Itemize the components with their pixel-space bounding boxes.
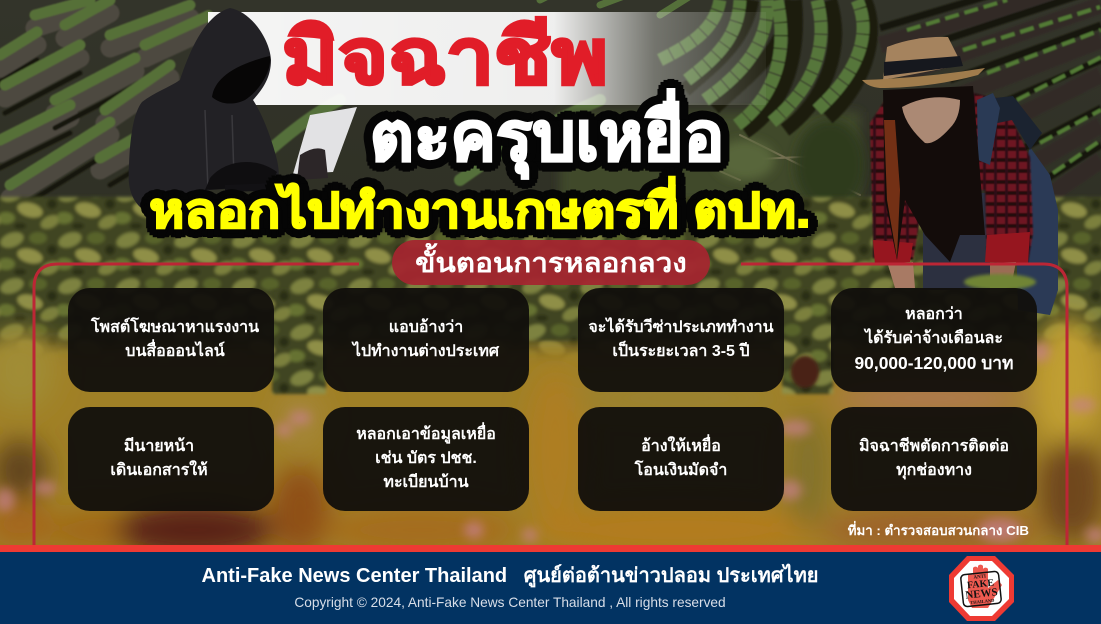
step card 6 [323,407,529,511]
title: red headline: มิจฉาชีพ [282,15,608,100]
steps heading: ขั้นตอนการหลอกลวง [415,248,687,278]
footer organisation name: Anti-Fake News Center Thailand ศูนย์ต่อต้านข่าวปลอม ประเทศไทย [202,565,818,587]
curved terraces [660,0,871,132]
step card 1: บนสื่อออนไลน์ [125,343,225,360]
step card 7: อ้างให้เหยื่อ [641,438,721,455]
source note: ที่มา : ตำรวจสอบสวนกลาง CIB [848,523,1029,538]
step card 4: ได้รับค่าจ้างเดือนละ [865,330,1003,347]
step card 3 [578,288,784,392]
logo: Anti Fake News stop sign: FAKE [967,578,995,591]
step card 3: เป็นระยะเวลา 3-5 ปี [612,343,750,360]
logo: Anti Fake News stop sign: THAILAND [970,598,995,605]
white title band [208,12,766,105]
sharp foliage between the cards [272,290,833,394]
middle terraces [270,0,865,210]
footer copyright: Copyright © 2024, Anti-Fake News Center Thailand , All rights reserved [294,595,726,610]
title: white headline: ตะครุบเหยื่อ [370,99,724,175]
step card 8: มิจฉาชีพตัดการติดต่อ [859,438,1009,455]
blurred foreground leaves [0,345,1101,565]
step card 4 [831,288,1037,392]
step card 7: โอนเงินมัดจำ [635,462,727,479]
step card 8 [831,407,1037,511]
step card 2: แอบอ้างว่า [389,319,463,336]
footer navy panel [0,552,1101,624]
step card 6: เช่น บัตร ปชช. [375,450,477,467]
step card 6: หลอกเอาข้อมูลเหยื่อ [356,426,496,443]
footer red strip [0,545,1101,552]
steps pill [392,240,710,285]
steps frame [34,264,1067,545]
step card 2 [323,288,529,392]
step card 4: หลอกว่า [905,306,963,323]
step card 5: มีนายหน้า [124,438,194,455]
step card 1: โพสต์โฆษณาหาแรงงาน [91,319,259,336]
step card 6: ทะเบียนบ้าน [383,474,469,491]
step card 4: 90,000-120,000 บาท [855,353,1013,373]
logo: Anti Fake News stop sign [949,556,1014,621]
step card 3: จะได้รับวีซ่าประเภททำงาน [588,319,774,336]
icon: hooded hacker with laptop [129,8,357,210]
step card 5 [68,407,274,511]
step card 1 [68,288,274,392]
step card 8: ทุกช่องทาง [896,462,972,479]
logo: Anti Fake News stop sign: ANTI [973,574,986,581]
right terraces [880,0,1101,195]
step card 5: เดินเอกสารให้ [110,462,208,479]
icon: farmer woman in hat and red plaid shirt [862,37,1058,315]
step card 2: ไปทำงานต่างประเทศ [353,343,499,360]
logo: Anti Fake News stop sign: NEWS [965,586,998,602]
foliage [0,197,1101,407]
pink bokeh spots [0,342,1101,543]
step card 7 [578,407,784,511]
title: yellow headline: หลอกไปทำงานเกษตรที่ ตปท. [149,185,811,238]
left terraces [0,0,210,214]
